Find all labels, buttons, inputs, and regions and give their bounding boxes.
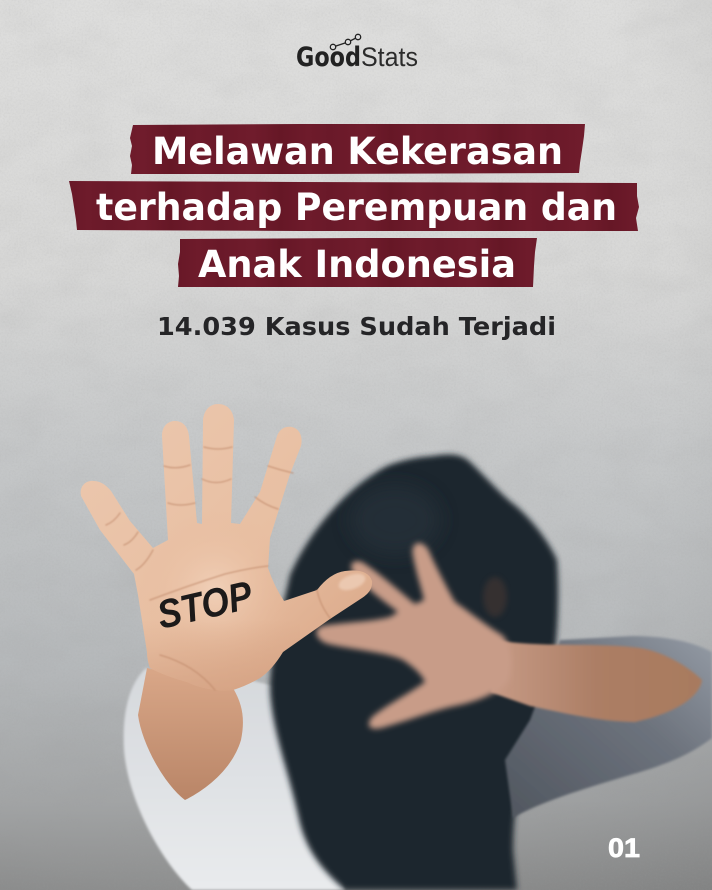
ribbon line 3: Anak Indonesia — [198, 243, 516, 286]
right forearm — [490, 640, 702, 722]
subtitle: 14.039 Kasus Sudah Terjadi — [157, 312, 556, 341]
forearm — [138, 668, 243, 800]
foreground hand with STOP — [81, 404, 372, 800]
palm shading — [146, 566, 290, 690]
right sleeve — [505, 636, 712, 818]
hand silhouette — [81, 404, 372, 690]
logo: GoodStats — [296, 34, 418, 73]
page number: 01 — [608, 833, 640, 863]
logo: GoodStats: Good — [296, 42, 361, 73]
hand creases — [106, 447, 330, 690]
STOP handwritten: STOP — [153, 573, 257, 638]
ribbon line 2: terhadap Perempuan dan — [96, 186, 617, 229]
ribbon line 1: Melawan Kekerasan — [152, 130, 563, 173]
blurred hand — [316, 543, 511, 729]
title ribbons — [69, 124, 639, 287]
hair — [270, 454, 558, 890]
blurred person in background — [124, 454, 712, 890]
logo: GoodStats: Stats — [361, 42, 418, 72]
thumb highlight — [336, 571, 368, 593]
dark ear shadow — [483, 577, 507, 617]
left sleeve and white shirt — [124, 668, 345, 890]
hair highlight — [350, 485, 440, 555]
